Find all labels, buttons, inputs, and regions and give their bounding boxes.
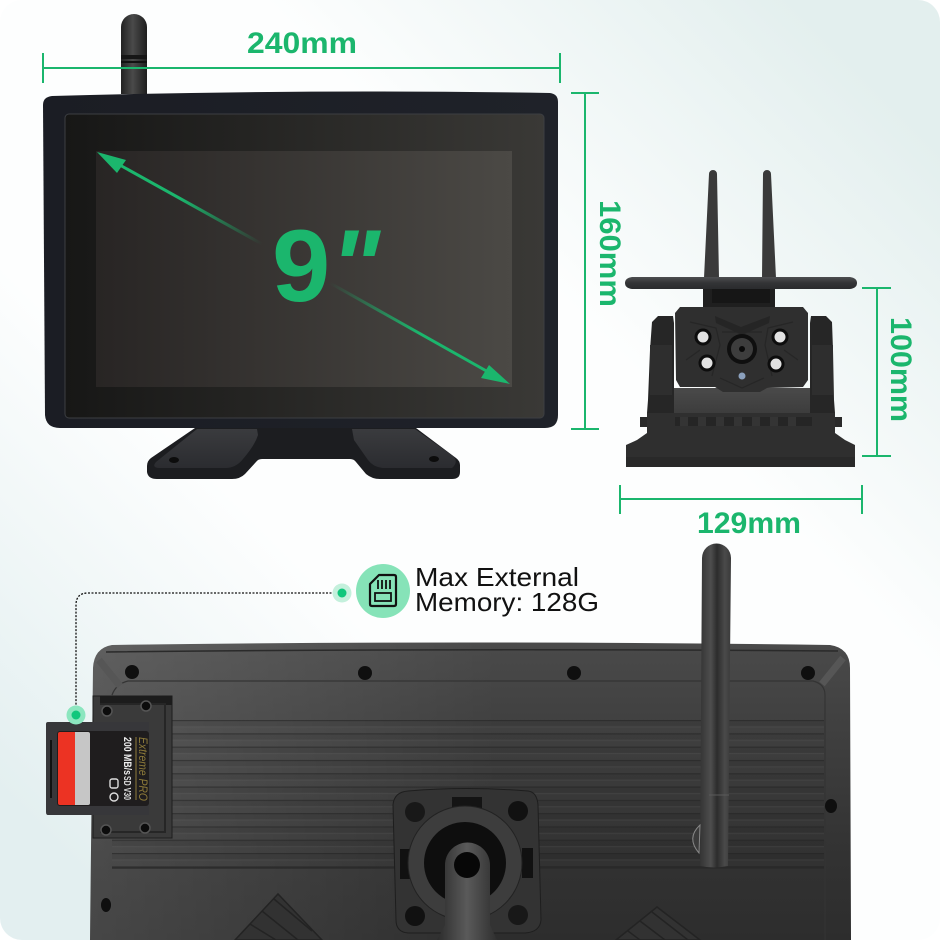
camera sensor bbox=[738, 372, 746, 380]
SD label grey bbox=[75, 732, 90, 805]
camera base bbox=[626, 413, 855, 467]
camera height dimension 100mm: 100mm bbox=[884, 317, 917, 422]
monitor display area bbox=[96, 151, 512, 387]
monitor glass bbox=[65, 114, 544, 418]
SD card speed: 200 MB/s bbox=[121, 737, 133, 775]
height dimension 160mm bbox=[571, 93, 626, 429]
camera tray bbox=[672, 388, 812, 418]
width dimension 240mm bbox=[43, 27, 560, 83]
back screws bbox=[101, 665, 837, 912]
back antenna bbox=[693, 544, 731, 868]
backup camera bbox=[625, 170, 857, 467]
camera mount neck bbox=[703, 288, 775, 310]
icon: SD card bbox=[356, 564, 410, 618]
SD label red bbox=[58, 732, 75, 805]
ventilation ribs bbox=[112, 720, 824, 868]
back panel left highlight bbox=[90, 642, 500, 940]
height dimension 160mm: 160mm bbox=[593, 200, 626, 307]
callout text bbox=[415, 562, 599, 617]
callout connector bbox=[76, 593, 342, 715]
screen size label: 9" bbox=[272, 209, 382, 323]
camera height dimension 100mm bbox=[862, 288, 917, 456]
camera LEDs bbox=[696, 330, 787, 371]
callout text: Memory: 128G bbox=[415, 587, 599, 617]
camera antennas bbox=[704, 170, 776, 278]
back panel bbox=[90, 642, 851, 940]
diagonal arrow bbox=[97, 152, 510, 384]
SD card brand text: Extreme PRO bbox=[136, 737, 150, 801]
SD card bbox=[46, 722, 150, 815]
rubber pads bbox=[235, 894, 700, 940]
callout dot at card bbox=[66, 706, 86, 724]
SD slot bbox=[93, 696, 172, 838]
monitor back view bbox=[46, 544, 851, 940]
callout text: Max External bbox=[415, 562, 579, 592]
camera head bbox=[675, 307, 808, 392]
camera bracket arms bbox=[647, 316, 835, 413]
monitor antenna bbox=[121, 14, 147, 94]
monitor bezel bbox=[43, 92, 558, 428]
width dimension 240mm: 240mm bbox=[247, 27, 357, 60]
callout dot at label bbox=[332, 584, 352, 602]
mount plate bbox=[393, 788, 541, 940]
camera width dimension 129mm: 129mm bbox=[697, 507, 801, 540]
camera lens bbox=[727, 334, 757, 364]
camera width dimension 129mm bbox=[620, 485, 862, 540]
SD card marks: SD V30 bbox=[121, 776, 132, 800]
back panel rim bbox=[99, 650, 843, 940]
camera sun shield bbox=[625, 277, 857, 289]
monitor front view bbox=[43, 14, 558, 479]
monitor stand bbox=[147, 428, 460, 479]
